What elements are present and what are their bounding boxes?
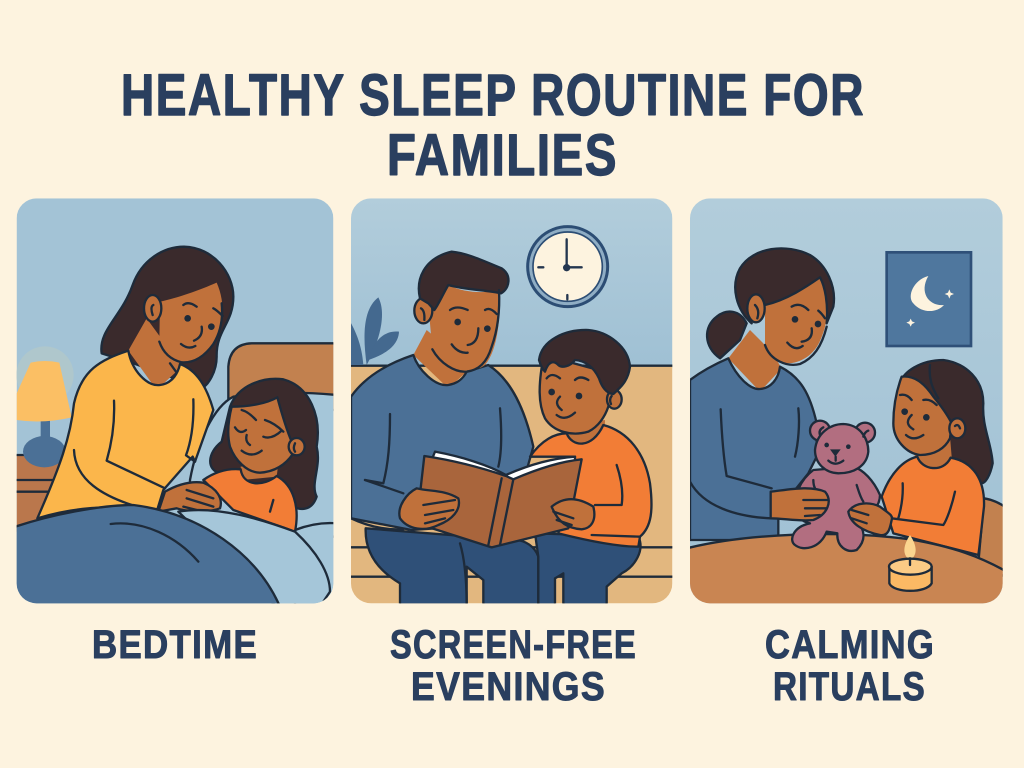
title: FAMILIES (387, 123, 618, 188)
label: screen-free evenings: EVENINGS (411, 665, 606, 709)
panel: bedtime (13, 198, 337, 607)
figure: sleeping child (203, 379, 318, 532)
figure: mother (37, 247, 233, 518)
title (121, 63, 865, 188)
headboard (228, 343, 337, 410)
panel: screen-free evenings (348, 198, 672, 607)
hand on blanket (158, 482, 221, 512)
icon: plant (348, 297, 399, 365)
bench (351, 366, 672, 603)
pillow (190, 393, 337, 537)
icon: bedside lamp (16, 346, 74, 532)
icon: teddy bear (792, 421, 880, 551)
table (687, 534, 1007, 607)
picture: moon and stars (887, 252, 971, 346)
panel: calming rituals (687, 198, 1007, 607)
label: bedtime: BEDTIME (92, 623, 258, 667)
figure: father (351, 252, 538, 607)
figure: daughter (882, 360, 993, 555)
label: screen-free evenings (390, 623, 637, 709)
label: screen-free evenings: SCREEN-FREE (390, 623, 637, 667)
icon: candle (889, 535, 932, 591)
figure: mother with ponytail (690, 248, 834, 540)
label: calming rituals: CALMING (765, 623, 935, 667)
hands holding teddy (771, 488, 892, 535)
label: calming rituals: RITUALS (773, 665, 926, 709)
chair (978, 498, 1005, 577)
hands holding book (351, 480, 594, 529)
label: calming rituals (765, 623, 935, 709)
icon: clock (528, 227, 608, 307)
figure: son (530, 330, 652, 607)
blanket (13, 505, 330, 607)
book (417, 452, 582, 547)
